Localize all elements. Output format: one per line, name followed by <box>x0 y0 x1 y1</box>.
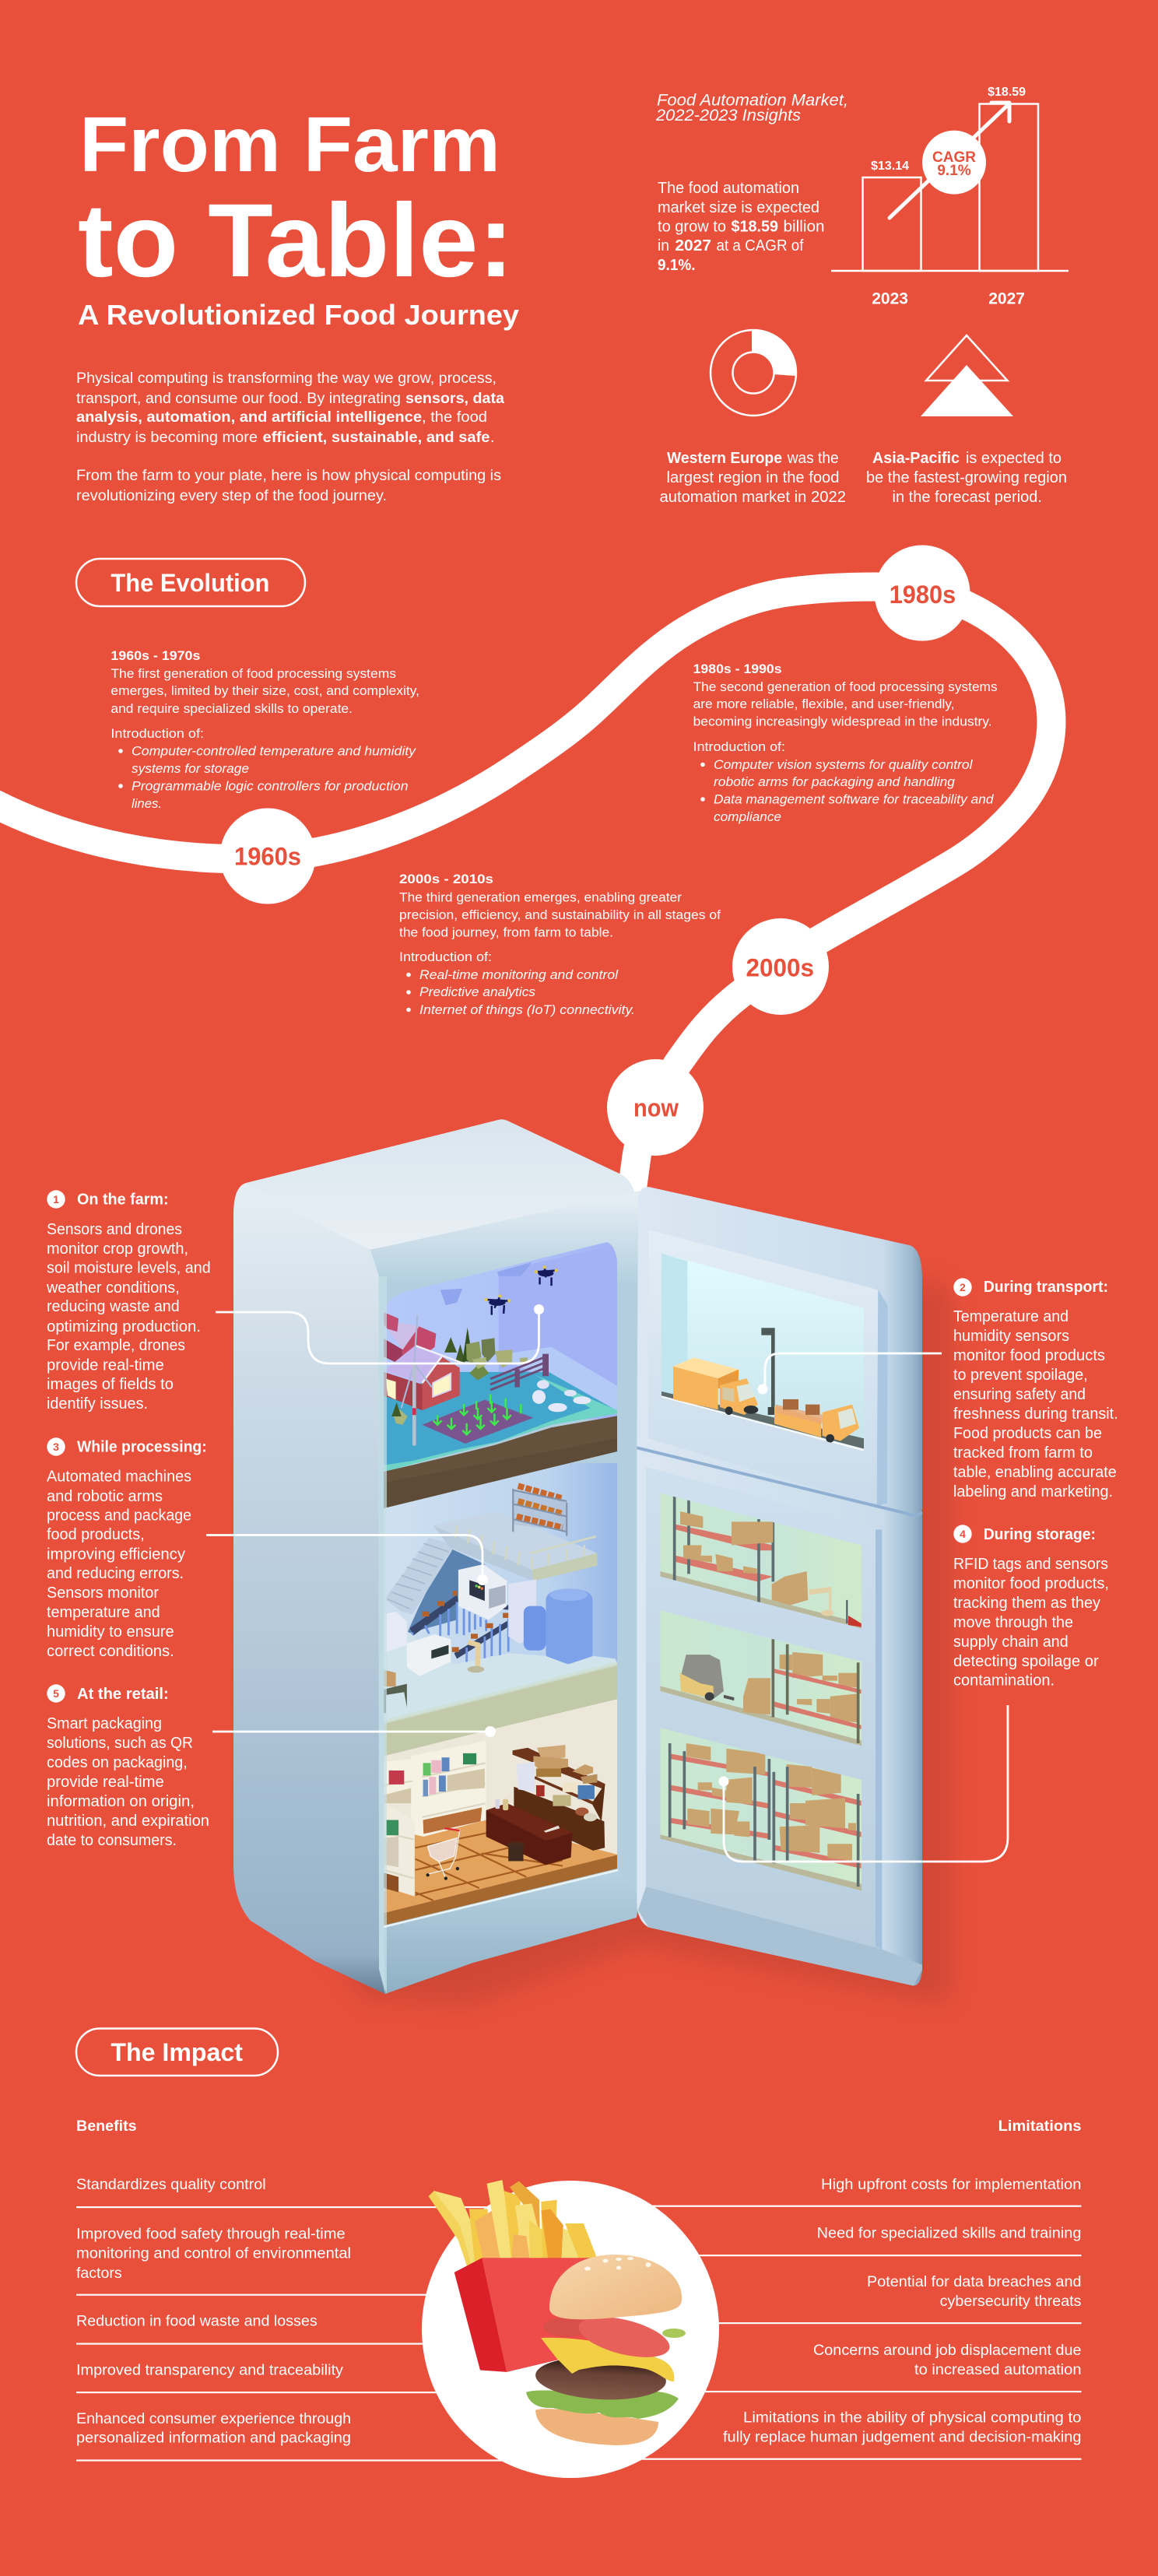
shopping cart <box>428 1828 460 1879</box>
market size text: 2027 <box>675 237 711 254</box>
callout: during storage: monitor food products, <box>953 1575 1109 1592</box>
dark wall <box>407 1548 485 1634</box>
callout: during transport: ensuring safety and <box>953 1386 1086 1403</box>
timeline node: 2000s: 2000s <box>746 954 814 982</box>
Western Europe text: Western Europe <box>667 449 782 467</box>
callout: at the retail: solutions, such as QR <box>47 1735 193 1752</box>
callout: while processing: correct conditions. <box>47 1643 174 1660</box>
callout: on the farm: On the farm: <box>77 1191 169 1209</box>
fridge base <box>384 1869 640 1994</box>
Asia-Pacific text: is expected to <box>966 449 1062 467</box>
benefits list: personalized information and packaging <box>76 2430 351 2447</box>
barn back building <box>384 1339 403 1362</box>
patty <box>535 2354 667 2402</box>
callout: at the retail: Smart packaging <box>47 1715 162 1732</box>
tanks <box>524 1606 546 1651</box>
Asia-Pacific text: in the forecast period. <box>892 488 1042 506</box>
badge 5: 5 <box>53 1687 59 1700</box>
CAGR badge: 9.1% <box>937 163 971 179</box>
benefits list: Standardizes quality control <box>76 2176 266 2193</box>
connector: storage <box>719 1705 1008 1862</box>
title: A Revolutionized Food Journey <box>78 299 519 331</box>
fence <box>490 1356 546 1390</box>
heading: The Evolution <box>76 559 305 606</box>
text: 1980s - 1990s: Data management software for traceability and <box>714 793 994 807</box>
market size text: to grow to <box>658 218 726 235</box>
text: 2000s - 2010s: the food journey, from farm to table. <box>399 926 613 940</box>
intro text block: revolutionizing every step of the food journey. <box>76 487 387 504</box>
text: 2000s - 2010s: The third generation emerges, enabling greater <box>399 890 683 904</box>
badge 1 <box>47 1190 65 1209</box>
callout: during transport: freshness during transit. <box>953 1406 1118 1423</box>
timeline node: now <box>607 1059 704 1156</box>
connector: transport <box>758 1353 942 1395</box>
fridge door <box>637 1187 922 1985</box>
callout: during transport: table, enabling accurate <box>953 1464 1117 1481</box>
callout: during transport: to prevent spoilage, <box>953 1367 1088 1384</box>
floor <box>398 1631 617 1706</box>
text: 1980s - 1990s: are more reliable, flexible, and user-friendly, <box>693 697 955 711</box>
callout: during storage: supply chain and <box>953 1634 1069 1651</box>
Western Europe text: automation market in 2022 <box>660 488 846 506</box>
storage window 3 <box>660 1728 861 1891</box>
retail wall <box>384 1699 617 1914</box>
Western Europe text: was the <box>787 449 839 467</box>
intro text block: From the farm to your plate, here is how physical computing is <box>76 467 501 484</box>
fries box <box>482 2258 605 2372</box>
callout: during storage: During storage: <box>984 1526 1096 1543</box>
CAGR badge: CAGR <box>932 149 976 166</box>
text: 1960s - 1970s: and require specialized skills to operate. <box>111 702 353 716</box>
callout: on the farm: optimizing production. <box>47 1318 201 1335</box>
road <box>661 1392 864 1451</box>
callout: while processing: process and package <box>47 1507 191 1524</box>
badge 5 <box>47 1684 65 1703</box>
callout: on the farm: weather conditions, <box>46 1279 180 1297</box>
text: 1960s - 1970s: systems for storage <box>132 762 249 776</box>
limitations list: fully replace human judgement and decision-making <box>723 2429 1082 2446</box>
callout: at the retail <box>47 1684 209 1849</box>
text: 1960s - 1970s: Computer-controlled temperature and humidity <box>132 744 417 758</box>
machine 1 <box>458 1564 507 1620</box>
callout: during transport: humidity sensors <box>953 1328 1069 1345</box>
conveyors <box>409 1595 458 1635</box>
interior scenes <box>384 1241 618 1925</box>
limitations list: High upfront costs for implementation <box>821 2176 1082 2193</box>
sheep <box>537 1380 549 1389</box>
callout: while processing: food products, <box>47 1526 145 1543</box>
connector: farm <box>216 1304 544 1363</box>
stairs <box>384 1538 454 1614</box>
bar chart: market growth: 2027 <box>988 290 1025 308</box>
benefits list: Reduction in food waste and losses <box>76 2313 318 2330</box>
truck 1 <box>673 1357 739 1378</box>
callout: during transport: Food products can be <box>953 1425 1102 1442</box>
callout: while processing: humidity to ensure <box>47 1623 174 1641</box>
badge 2 <box>953 1278 972 1297</box>
cheese <box>541 2338 674 2381</box>
farm soil over processing <box>384 1417 617 1508</box>
text: 2000s - 2010s: Predictive analytics <box>419 985 535 999</box>
market size text: billion <box>783 218 825 235</box>
callout: while processing: improving efficiency <box>47 1546 185 1563</box>
machine 2 <box>407 1634 451 1676</box>
table <box>384 1670 396 1686</box>
badge 2: 2 <box>960 1281 966 1293</box>
CAGR badge <box>922 131 986 195</box>
timeline node: 1960s: 1960s <box>234 843 301 871</box>
text: 1980s - 1990s: 1980s - 1990s <box>693 662 782 676</box>
callout: during storage: move through the <box>953 1614 1073 1631</box>
intro text block: , the food <box>422 409 487 426</box>
market insights heading <box>655 92 848 125</box>
market insights heading: Food Automation Market, <box>657 92 848 109</box>
callout: during transport: During transport: <box>984 1279 1108 1296</box>
bar chart: market growth: 2023 <box>872 290 908 308</box>
market size text: at a CAGR of <box>716 237 804 254</box>
badge 4: 4 <box>960 1528 966 1540</box>
benefits list: Improved transparency and traceability <box>76 2362 343 2379</box>
text: 1960s - 1970s <box>111 649 419 811</box>
crop plot <box>422 1400 533 1444</box>
storage window 2 <box>660 1610 861 1746</box>
truck 2 <box>774 1406 821 1437</box>
goods on shelf <box>537 1745 565 1760</box>
heading: The Impact <box>76 2028 278 2076</box>
market size text: in <box>658 237 669 254</box>
limitations list: Concerns around job displacement due <box>813 2342 1082 2359</box>
bottom bun <box>535 2409 658 2445</box>
badge 3 <box>47 1437 65 1456</box>
tomato <box>543 2317 593 2337</box>
limitations list: Potential for data breaches and <box>867 2273 1082 2290</box>
storage window 1 <box>660 1493 861 1629</box>
back counter <box>514 1787 605 1851</box>
text: 1980s - 1990s <box>693 662 998 824</box>
intro text block: transport, and consume our food. By integrating <box>76 390 401 407</box>
market size text: market size is expected <box>658 198 819 216</box>
scene 1: farm <box>384 1241 617 1508</box>
heading: The Impact: The Impact <box>111 2038 243 2066</box>
callout: while processing: and robotic arms <box>47 1488 163 1505</box>
door divider <box>637 1448 922 1515</box>
timeline node: 1980s <box>875 545 970 641</box>
shelves <box>411 1741 486 1837</box>
market size text: 9.1%. <box>658 256 696 274</box>
street lamp <box>761 1332 773 1413</box>
callout: at the retail: provide real-time <box>47 1774 164 1791</box>
benefits list: Enhanced consumer experience through <box>76 2410 351 2427</box>
market size text: $18.59 <box>732 218 778 235</box>
benefits list: monitoring and control of environmental <box>76 2245 351 2262</box>
limitations list <box>642 2118 1082 2460</box>
bar chart: market growth: $13.14 <box>871 160 909 173</box>
benefits list: Improved food safety through real-time <box>76 2226 346 2243</box>
callout: on the farm: For example, drones <box>47 1337 185 1354</box>
Western Europe text: largest region in the food <box>666 469 839 486</box>
callout: on the farm: provide real-time <box>47 1357 164 1374</box>
market size text <box>658 179 825 274</box>
callout: during transport: tracked from farm to <box>953 1444 1093 1462</box>
callout: on the farm: reducing waste and <box>47 1298 180 1315</box>
interior edge strip <box>378 1276 387 1994</box>
callout: during transport: monitor food products <box>953 1347 1105 1364</box>
callout: on the farm: Sensors and drones <box>47 1221 182 1238</box>
text: 1980s - 1990s: robotic arms for packaging and handling <box>714 775 956 789</box>
retail floor <box>384 1820 618 1914</box>
text: 1980s - 1990s: becoming increasingly widespread in the industry. <box>693 715 992 729</box>
timeline path <box>0 587 1051 1214</box>
callout: during transport: Temperature and <box>953 1308 1069 1325</box>
ground <box>384 1372 617 1469</box>
text: 1960s - 1970s: lines. <box>132 797 162 811</box>
Asia-Pacific text: Asia-Pacific <box>872 449 960 467</box>
text: 2000s - 2010s: precision, efficiency, and sustainability in all stages of <box>399 908 721 922</box>
intro text block: efficient, sustainable, and safe <box>263 429 490 446</box>
robot arm <box>468 1642 478 1667</box>
callout: at the retail: date to consumers. <box>47 1832 177 1849</box>
text: 2000s - 2010s <box>399 872 721 1017</box>
callout: while processing <box>47 1437 207 1660</box>
callout: at the retail: codes on packaging, <box>47 1754 188 1771</box>
trees <box>444 1337 457 1353</box>
fridge left side panel <box>233 1183 385 1994</box>
timeline node: 1960s <box>219 808 316 904</box>
limitations list: to increased automation <box>914 2361 1082 2378</box>
sales counter <box>486 1803 572 1865</box>
rack with boxes upper <box>513 1486 567 1536</box>
Asia-Pacific text: be the fastest-growing region <box>866 469 1067 486</box>
limitations list: Need for specialized skills and training <box>817 2225 1082 2242</box>
heading: The Evolution: The Evolution <box>111 569 269 597</box>
mezzanine <box>434 1520 597 1569</box>
title: From Farm <box>79 101 500 188</box>
callout: on the farm: soil moisture levels, and <box>47 1259 211 1276</box>
illustration: burger <box>526 2255 686 2445</box>
badge 4 <box>953 1525 972 1543</box>
limitations list: Limitations in the ability of physical computing to <box>743 2409 1082 2427</box>
market size text: The food automation <box>658 179 799 197</box>
intro text block: . <box>490 429 494 446</box>
text: 1960s - 1970s: Introduction of: <box>111 727 204 741</box>
text: 1980s - 1990s: Computer vision systems for quality control <box>714 758 974 772</box>
text: 1980s - 1990s: The second generation of food processing systems <box>693 680 998 694</box>
lower door <box>637 1446 922 1985</box>
callout: on the farm: images of fields to <box>47 1376 174 1393</box>
fridge top <box>246 1119 635 1250</box>
callout: during storage: contamination. <box>953 1672 1054 1690</box>
stool <box>507 1841 525 1848</box>
intro text block: sensors, data <box>405 390 504 407</box>
callout: at the retail: At the retail: <box>77 1686 169 1703</box>
timeline node: 1980s: 1980s <box>890 581 956 609</box>
text: 1960s - 1970s: Programmable logic controllers for production <box>132 780 408 794</box>
bar chart: market growth: $18.59 <box>988 86 1026 99</box>
callout: during storage: detecting spoilage or <box>953 1653 1099 1670</box>
market insights heading: 2022-2023 Insights <box>655 107 802 125</box>
benefits list <box>76 2118 504 2462</box>
callout: during storage: tracking them as they <box>953 1595 1100 1612</box>
pickle <box>662 2329 686 2338</box>
benefits list: factors <box>76 2265 122 2282</box>
bar chart: market growth <box>831 86 1069 308</box>
callout: at the retail: nutrition, and expiration <box>47 1813 209 1830</box>
connector: retail <box>212 1726 496 1737</box>
callout: on the farm <box>46 1190 211 1413</box>
icon: triangles <box>921 335 1013 416</box>
upper door <box>637 1187 922 1514</box>
text: 1960s - 1970s: 1960s - 1970s <box>111 649 200 663</box>
soil <box>384 1416 617 1508</box>
lettuce <box>526 2390 679 2419</box>
sesame seeds <box>584 2257 651 2271</box>
badge 1: 1 <box>53 1193 59 1206</box>
intro text block: Physical computing is transforming the way we grow, process, <box>76 370 497 387</box>
text: 1980s - 1990s: compliance <box>714 810 781 824</box>
title: to Table: <box>78 183 514 299</box>
callout: during storage <box>953 1525 1109 1690</box>
windmill <box>402 1315 432 1408</box>
fridge front frame <box>370 1191 640 1994</box>
transport window <box>661 1253 864 1451</box>
fridge shadow <box>327 1276 951 2004</box>
callout: during transport <box>953 1278 1118 1500</box>
icon: donut chart <box>711 330 796 416</box>
title <box>78 101 519 331</box>
drones <box>484 1265 558 1315</box>
callout: while processing: and reducing errors. <box>47 1565 184 1582</box>
intro text block: industry is becoming more <box>76 429 258 446</box>
text: 2000s - 2010s: Introduction of: <box>399 950 492 964</box>
timeline node: 2000s <box>732 918 829 1015</box>
intro text block <box>76 370 504 504</box>
text: 2000s - 2010s: 2000s - 2010s <box>399 872 493 886</box>
top bun <box>549 2255 682 2319</box>
benefits list: Benefits <box>76 2118 137 2135</box>
limitations list: cybersecurity threats <box>940 2293 1082 2310</box>
illustration: fries <box>429 2180 605 2372</box>
text: 2000s - 2010s: Internet of things (IoT) connectivity. <box>419 1003 635 1017</box>
slab <box>384 1665 617 1756</box>
callout: while processing: Sensors monitor <box>47 1585 159 1602</box>
callout: during transport: labeling and marketing. <box>953 1483 1113 1500</box>
Asia-Pacific text <box>866 449 1067 506</box>
barn front building <box>384 1372 422 1410</box>
callout: while processing: Automated machines <box>47 1469 191 1486</box>
intro text block: analysis, automation, and artificial intelligence <box>76 409 422 426</box>
timeline node: now: now <box>633 1094 679 1122</box>
left block <box>387 1612 407 1651</box>
Western Europe text <box>660 449 846 506</box>
text: 1960s - 1970s: emerges, limited by their size, cost, and complexity, <box>111 684 419 698</box>
illustration: fridge <box>233 1119 922 1994</box>
processing scene <box>384 1511 618 1925</box>
callout: while processing: While processing: <box>77 1439 207 1456</box>
callout: during storage: RFID tags and sensors <box>953 1556 1108 1573</box>
connector: processing <box>206 1535 488 1585</box>
callout: while processing: temperature and <box>47 1604 160 1621</box>
callout: on the farm: identify issues. <box>47 1395 148 1413</box>
fries sticks <box>429 2180 598 2267</box>
limitations list: Limitations <box>998 2118 1082 2135</box>
callout: on the farm: monitor crop growth, <box>47 1241 188 1258</box>
callout: at the retail: information on origin, <box>47 1793 195 1810</box>
circle behind food <box>422 2181 719 2478</box>
scene 3 background: processing <box>384 1463 617 1664</box>
badge 3: 3 <box>53 1441 59 1453</box>
text: 1980s - 1990s: Introduction of: <box>693 740 785 754</box>
text: 1960s - 1970s: The first generation of food processing systems <box>111 667 396 681</box>
text: 2000s - 2010s: Real-time monitoring and control <box>419 968 619 982</box>
